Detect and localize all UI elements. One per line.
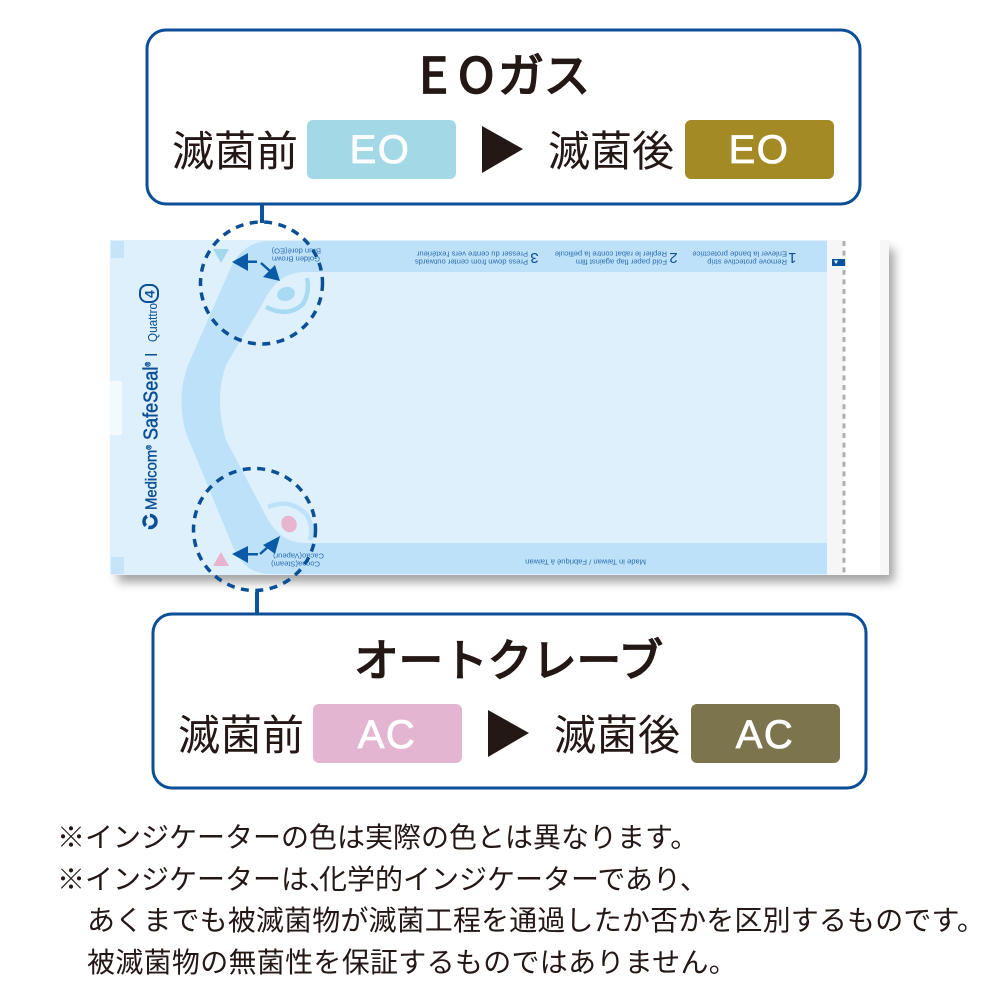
heading: EO gas: E xyxy=(419,37,448,108)
swatch: AC after: AC xyxy=(736,713,794,757)
arrow: EO before to after xyxy=(482,126,523,173)
arrow: to EO dot xyxy=(261,263,280,281)
brand logo text: ® xyxy=(146,444,154,450)
corner tabs xyxy=(111,241,124,258)
swatch: AC before: AC xyxy=(358,713,416,757)
brand logo text: Quattro xyxy=(145,303,160,342)
swatch: EO before xyxy=(307,120,456,179)
brand logo text: 4 xyxy=(142,290,158,298)
panel: autoclave xyxy=(153,614,866,788)
connector: AC box to circle xyxy=(255,592,259,614)
indicator band xyxy=(181,241,827,574)
heading: EO gas: O xyxy=(458,37,494,108)
label: before sterilization: 滅菌前 xyxy=(172,128,298,175)
brand logo text: SafeSeal xyxy=(140,359,162,440)
notes xyxy=(57,822,985,978)
callout: EO circle with arrows xyxy=(200,222,322,344)
logo symbol xyxy=(144,516,156,528)
label: before sterilization: 滅菌前 xyxy=(178,712,304,759)
upside-down instructions: Cocoa(Steam) xyxy=(271,560,320,568)
upside-down instructions: Golden Brown xyxy=(272,254,320,264)
heading: EO gas xyxy=(419,37,590,108)
brand logo text: ® xyxy=(144,361,152,367)
upside-down instructions: Press down from center outwards xyxy=(415,258,528,266)
upside-down instructions: 2 xyxy=(669,249,678,266)
notes: ※インジケーターの色は実際の色とは異なります。 xyxy=(57,822,698,853)
swatch: AC before xyxy=(313,704,462,763)
arrow: to AC dot xyxy=(260,536,280,554)
brand logo text xyxy=(140,285,162,528)
notes: あくまでも被滅菌物が滅菌工程を通過したか否かを区別するものです。 xyxy=(87,905,985,936)
upside-down instructions xyxy=(271,246,797,568)
panel: EO gas xyxy=(147,30,860,204)
AC triangle marker xyxy=(213,552,229,566)
label: after sterilization: 滅菌後 xyxy=(554,712,680,759)
upside-down instructions: Made in Taiwan / Fabriqué à Taiwan xyxy=(525,558,646,566)
arrow: to AC triangle xyxy=(232,546,258,563)
upside-down instructions: Brun doré(EO) xyxy=(271,246,321,256)
upside-down instructions: Enlever la bande protectrice xyxy=(692,250,787,258)
tear line xyxy=(842,241,846,575)
heading: EO gas: ガス xyxy=(498,40,590,106)
upside-down instructions: 3 xyxy=(530,249,539,266)
EO indicator dot and rings xyxy=(266,278,308,312)
notes: ※インジケーターは、化学的インジケーターであり、 xyxy=(57,864,708,895)
brand logo text: Medicom xyxy=(144,445,160,510)
upside-down instructions: 1 xyxy=(788,249,797,266)
arrow: to EO triangle xyxy=(232,253,257,271)
swatch: AC after xyxy=(691,704,840,763)
label: after sterilization: 滅菌後 xyxy=(548,128,674,175)
upside-down instructions: Replier le rabat contre la pellicule xyxy=(555,250,667,258)
notes: 被滅菌物の無菌性を保証するものではありません。 xyxy=(87,947,737,978)
upside-down instructions: Cacao(Vapeur) xyxy=(273,552,324,560)
upside-down instructions: Remove protective strip xyxy=(707,258,787,266)
sterilization pouch xyxy=(110,240,894,582)
swatch: EO after: EO xyxy=(729,128,789,172)
swatch: EO after xyxy=(685,120,834,179)
notch xyxy=(110,381,122,435)
AC indicator dot and rings xyxy=(268,504,311,540)
connector: EO box to circle xyxy=(260,204,264,223)
swatch: EO before: EO xyxy=(350,128,410,172)
upside-down instructions: Presser du centre vers l'extérieur xyxy=(416,250,528,258)
callout: AC circle with arrows xyxy=(194,468,316,590)
arrow: AC before to after xyxy=(488,710,529,757)
heading: autoclave: オートクレーブ xyxy=(354,624,663,689)
small tab mark xyxy=(832,259,845,266)
EO triangle marker xyxy=(213,249,229,263)
upside-down instructions: Fold paper flap against film xyxy=(576,258,667,266)
